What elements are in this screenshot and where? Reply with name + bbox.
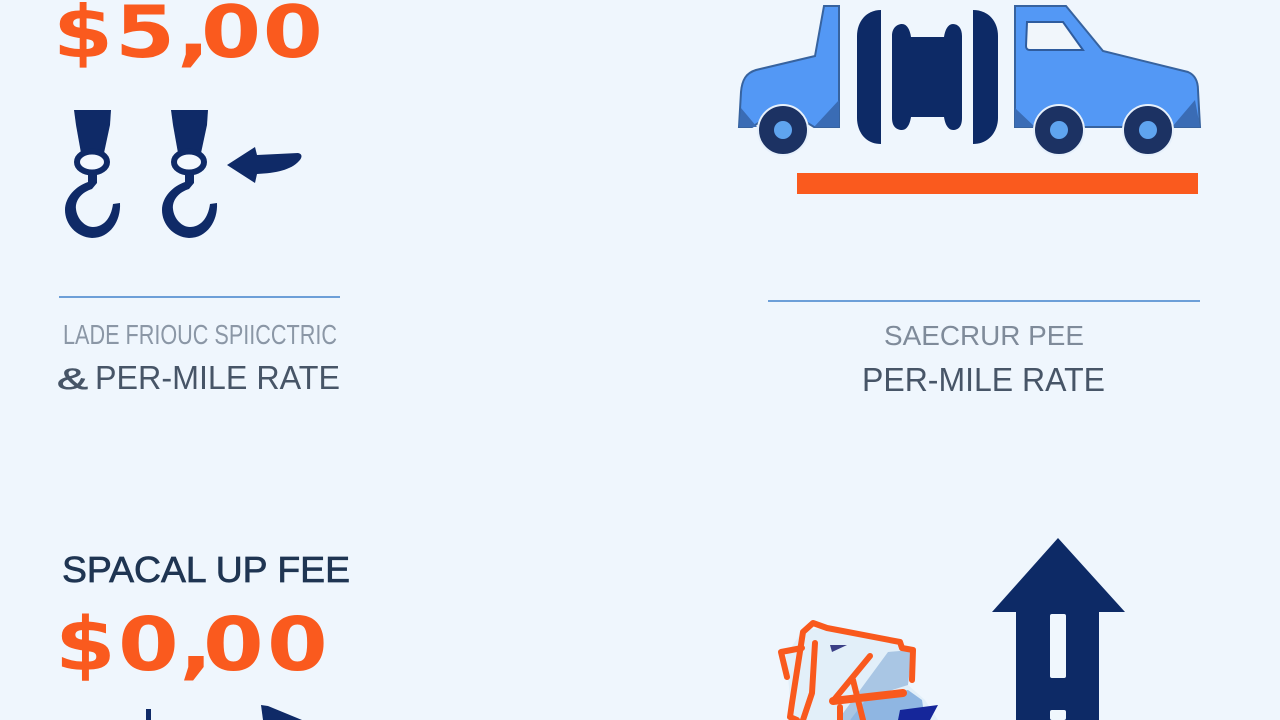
- bar: orange underline: [797, 173, 1198, 194]
- price: special up fee: $0,00: [55, 602, 328, 688]
- label: garbled fee descriptor left: LADE FRIOUC SPIICCTRIC: [63, 319, 337, 350]
- icon: left tow hook: [65, 110, 120, 238]
- heading: special up fee: SPACAL UP FEE: [62, 549, 350, 590]
- icon: cropped shapes at bottom left: [146, 705, 302, 720]
- truck: window: [1026, 22, 1083, 50]
- label: per-mile rate right: PER-MILE RATE: [862, 361, 1105, 398]
- divider: left: [59, 296, 340, 298]
- label: per-mile rate left: PER-MILE RATE: [95, 359, 340, 396]
- icon: two tow hooks with arrow: [65, 110, 302, 238]
- label: garbled fee descriptor right: SAECRUR PEE: [884, 320, 1084, 351]
- icon: tow truck split into parts: [739, 6, 1200, 155]
- label: per-mile rate left: &: [57, 363, 88, 396]
- icon: crumpled orange map or cards: [781, 623, 938, 720]
- truck: rear wheel: [1123, 105, 1173, 155]
- truck: middle wheel: [1034, 105, 1084, 155]
- truck: front cab piece: [739, 6, 839, 127]
- mark: small dark fleck: [830, 645, 847, 652]
- icon: road arrow pointing up: [992, 538, 1125, 720]
- truck: winch drum: [857, 10, 998, 144]
- truck: left wheel: [758, 105, 808, 155]
- divider: right: [768, 300, 1200, 302]
- truck: rear cab and bed: [1015, 6, 1200, 127]
- icon: arrow pointing left: [227, 147, 302, 183]
- icon: right tow hook: [162, 110, 217, 238]
